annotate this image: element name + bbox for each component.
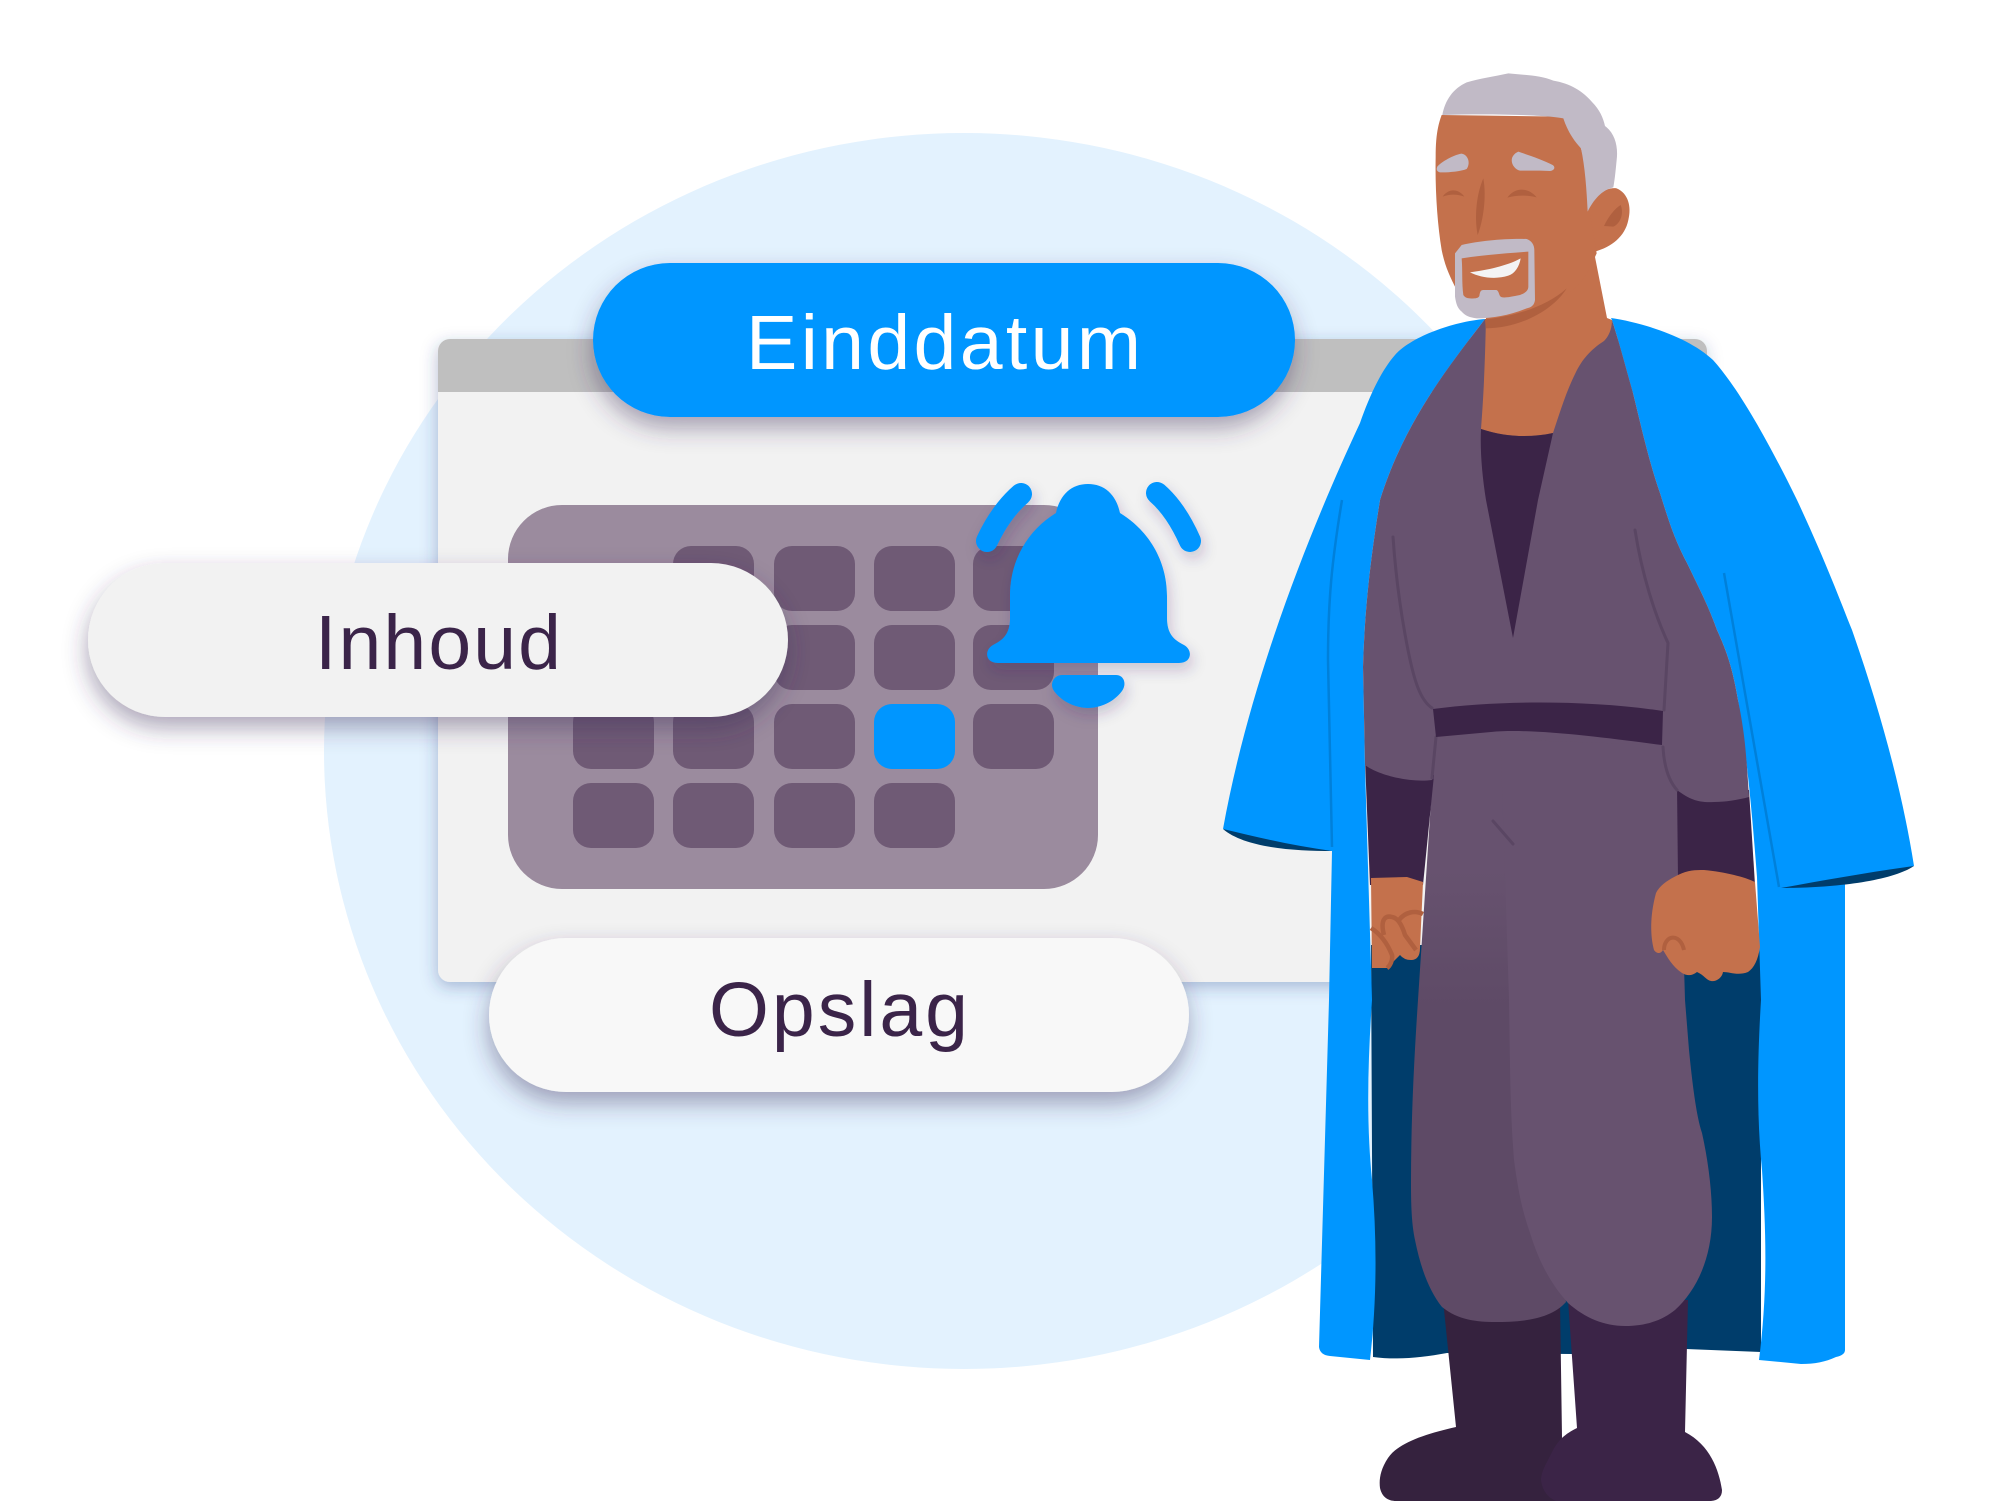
- nose: [1476, 178, 1485, 235]
- neck and chest: [1481, 250, 1612, 436]
- undershirt: [1481, 429, 1553, 638]
- left trouser leg: [1411, 725, 1566, 1322]
- label: Einddatum: Einddatum: [746, 300, 1141, 386]
- right trouser leg: [1500, 725, 1712, 1326]
- head, in local scale: [1436, 73, 1630, 328]
- cape right hem: [1781, 866, 1914, 888]
- ear: [1587, 188, 1630, 252]
- right under-sleeve: [1677, 785, 1755, 885]
- label: Inhoud: Inhoud: [315, 600, 561, 686]
- window header bar: [438, 339, 1707, 392]
- panel: browser window: [438, 339, 1707, 982]
- cape right panel: [1611, 318, 1914, 1364]
- character: older man in blue cape: [1223, 73, 1914, 1501]
- eyes: [1443, 190, 1537, 198]
- right hand: [1651, 870, 1760, 981]
- robe torso and sleeves: [1363, 319, 1749, 802]
- icon: notification bell: [987, 484, 1190, 708]
- pill: Opslag: [489, 938, 1189, 1092]
- right hand finger line: [1664, 938, 1684, 950]
- beard: [1455, 239, 1535, 318]
- cape fold lines: [1328, 500, 1779, 887]
- cape left panel: [1223, 319, 1485, 1360]
- pill: Inhoud: [88, 563, 788, 717]
- left under-sleeve: [1365, 760, 1434, 885]
- cape left hem: [1223, 829, 1332, 851]
- belt: [1433, 702, 1663, 745]
- right boot: [1541, 1300, 1722, 1501]
- hair: [1442, 73, 1617, 212]
- label: Opslag: Opslag: [709, 967, 968, 1053]
- calendar day cells: [573, 546, 1054, 848]
- panel: calendar: [508, 505, 1098, 889]
- eyebrows: [1437, 154, 1469, 172]
- left hand: [1371, 877, 1423, 968]
- left hand finger lines: [1371, 912, 1423, 968]
- background circle: [324, 133, 1604, 1369]
- cape lining: [1371, 945, 1761, 1358]
- pill: Einddatum: [593, 263, 1295, 417]
- smile: [1470, 258, 1521, 278]
- jaw shadow: [1485, 288, 1567, 328]
- left boot: [1380, 1300, 1562, 1501]
- face: [1436, 115, 1597, 317]
- robe fold lines: [1393, 530, 1677, 844]
